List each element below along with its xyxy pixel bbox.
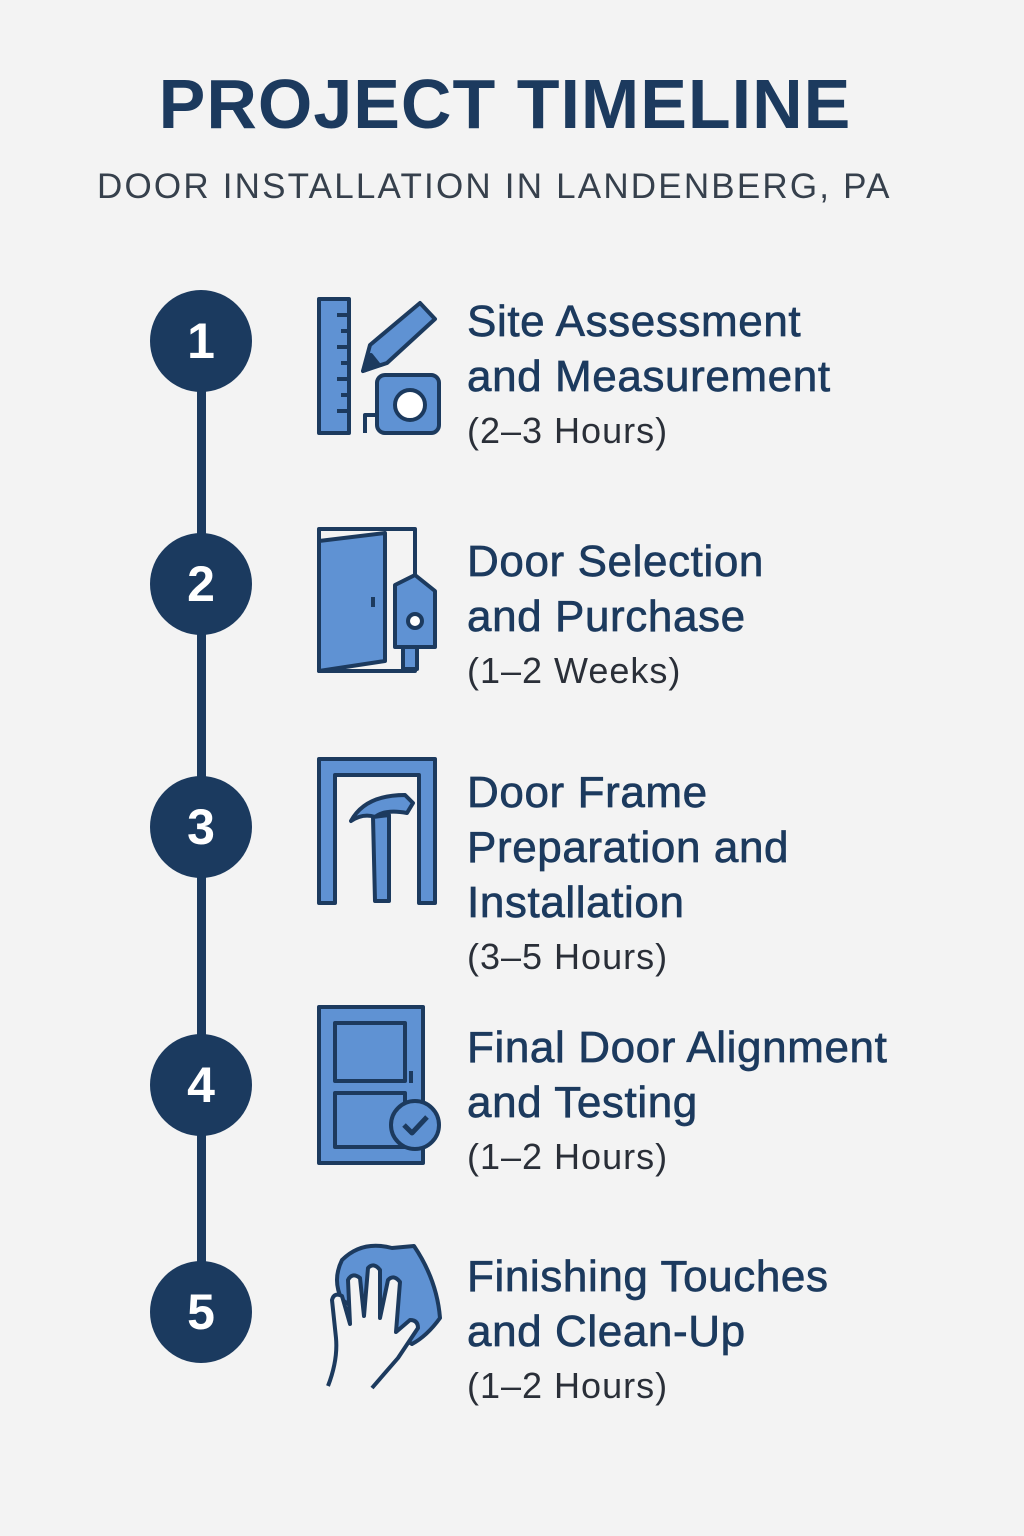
step 4 text [467,1023,887,1177]
step 2 text: Door Selection [467,537,764,586]
step 1 text: (2–3 Hours) [467,410,668,451]
circle 1: 1 [187,313,215,369]
step 1 text [467,297,831,451]
circle 4 [150,1034,252,1136]
step 4 text: Final Door Alignment [467,1023,887,1072]
icon: hand with cloth [326,1244,442,1390]
step 3 text [467,768,789,977]
step 4 text: and Testing [467,1078,698,1127]
icon: door with check [317,1005,441,1165]
circle 3: 3 [187,799,215,855]
step 5 text: and Clean-Up [467,1307,746,1356]
step 3 text: Preparation and [467,823,789,872]
step 2 text: and Purchase [467,592,746,641]
icon: frame hammer [317,757,437,905]
step 1 text: Site Assessment [467,297,801,346]
step 3 text: (3–5 Hours) [467,936,668,977]
step 1 text: and Measurement [467,352,831,401]
step 4 text: (1–2 Hours) [467,1136,668,1177]
circle 2 [150,533,252,635]
icon: door with tag [317,527,437,673]
circle 4: 4 [187,1057,215,1113]
circle 3 [150,776,252,878]
circle 5: 5 [187,1284,215,1340]
step 2 text [467,537,764,691]
step 5 text: Finishing Touches [467,1252,829,1301]
circle 1 [150,290,252,392]
step 3 text: Installation [467,878,685,927]
subtitle: DOOR INSTALLATION IN LANDENBERG, PA [97,167,892,206]
step 5 text [467,1252,829,1406]
circle 2: 2 [187,556,215,612]
icon: ruler pencil tape [317,297,441,435]
circle 5 [150,1261,252,1363]
timeline line [197,341,206,1312]
step 5 text: (1–2 Hours) [467,1365,668,1406]
title: PROJECT TIMELINE [159,65,851,143]
step 3 text: Door Frame [467,768,708,817]
step 2 text: (1–2 Weeks) [467,650,681,691]
